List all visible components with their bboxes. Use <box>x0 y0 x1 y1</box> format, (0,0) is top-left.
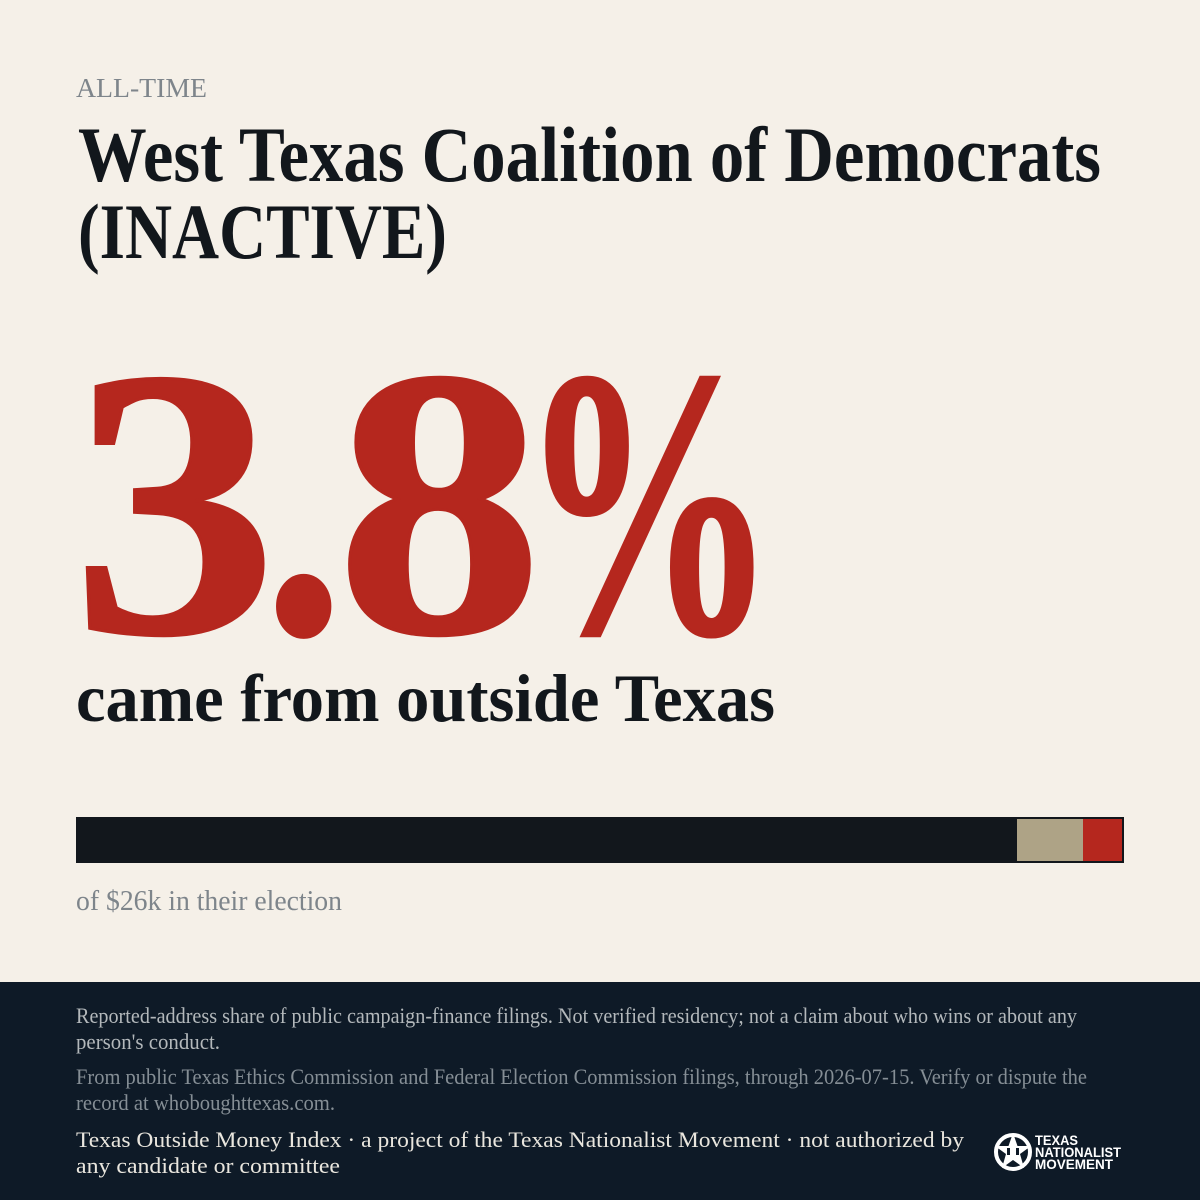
stacked share bar <box>76 817 1124 863</box>
big percentage statistic: . <box>263 290 344 715</box>
bar caption: of $26k in their election <box>76 885 342 917</box>
methodology note: person's conduct. <box>76 1029 220 1054</box>
source note <box>76 1064 1087 1115</box>
attribution: Texas Outside Money Index · a project of the Texas Nationalist Movement · not authorized by <box>76 1127 964 1152</box>
title <box>78 111 1101 275</box>
logo: Texas Nationalist Movement: MOVEMENT <box>1035 1157 1114 1172</box>
big percentage statistic: 3 <box>72 291 277 715</box>
attribution <box>76 1127 964 1178</box>
big percentage statistic: % <box>520 291 777 715</box>
logo: Texas Nationalist Movement <box>995 1133 1122 1172</box>
source note: record at whoboughttexas.com. <box>76 1090 335 1115</box>
logo: Texas Nationalist Movement: TEXAS <box>1035 1133 1078 1148</box>
eyebrow label: ALL-TIME <box>76 73 207 103</box>
source note: From public Texas Ethics Commission and Federal Election Commission filings, through 2026-07-15. Verify or dispute the <box>76 1064 1087 1089</box>
big percentage statistic: 8 <box>336 292 543 716</box>
statistic caption: came from outside Texas <box>76 660 775 736</box>
attribution: any candidate or committee <box>76 1153 340 1178</box>
footer panel <box>0 982 1200 1200</box>
title: (INACTIVE) <box>78 188 447 275</box>
logo: Texas Nationalist Movement: NATIONALIST <box>1035 1145 1122 1160</box>
methodology note: Reported-address share of public campaign-finance filings. Not verified residency; not a claim about who wins or about any <box>76 1003 1077 1028</box>
big percentage statistic <box>72 290 777 716</box>
methodology note <box>76 1003 1077 1054</box>
